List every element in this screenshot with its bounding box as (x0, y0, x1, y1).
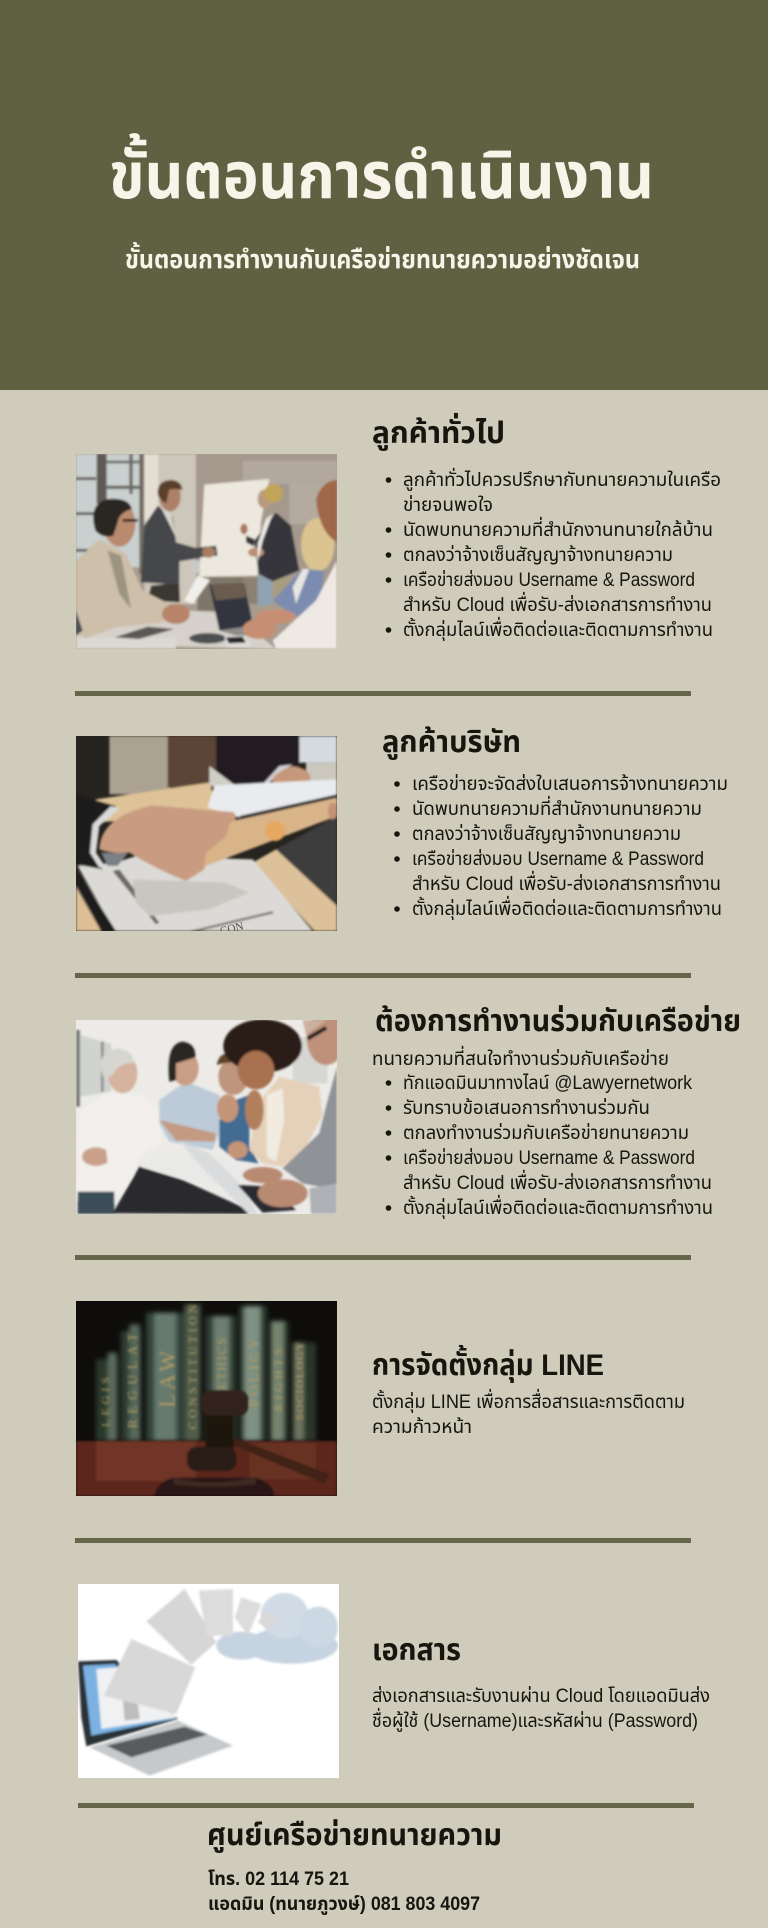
list: corporate clients: สำหรับ Cloud เพื่อรับ-ส่งเอกสารการทำงาน (412, 870, 721, 895)
photo: law books and gavel: POLICY (247, 1339, 262, 1407)
list: corporate clients: เครือข่ายส่งมอบ Username & Password (412, 847, 704, 870)
list: join the network: ตั้งกลุ่มไลน์เพื่อติดต่อและติดตามการทำงาน (403, 1194, 713, 1219)
text: documents description: ส่งเอกสารและรับงานผ่าน Cloud โดยแอดมินส่ง (372, 1684, 710, 1707)
heading: documents: เอกสาร (372, 1634, 461, 1667)
heading: LINE group: การจัดตั้งกลุ่ม LINE (372, 1344, 604, 1383)
photo: law books and gavel: CONSTITUTION (186, 1304, 200, 1429)
footer heading: ศูนย์เครือข่ายทนายความ (207, 1819, 502, 1853)
list: general clients: ลูกค้าทั่วไปควรปรึกษากับทนายความในเครือ (403, 467, 721, 492)
list: general clients: เครือข่ายส่งมอบ Username & Password (403, 568, 695, 591)
list: join the network (372, 1045, 713, 1219)
photo: law books and gavel: LAW (154, 1351, 179, 1408)
photo: law books and gavel (76, 1301, 337, 1496)
footer contact: แอดมิน (ทนายภูวงษ์) 081 803 4097 (208, 1894, 480, 1915)
heading: general clients: ลูกค้าทั่วไป (372, 412, 505, 451)
title: ขั้นตอนการดำเนินงาน (109, 132, 654, 212)
photo: law books and gavel: ETHICS (215, 1338, 229, 1389)
heading: join the network: ต้องการทำงานร่วมกับเครือข่าย (375, 1005, 741, 1038)
photo: business meeting (76, 454, 337, 649)
text: LINE group description (372, 1388, 685, 1438)
photo: law books and gavel: SOCIOLOGY (294, 1342, 306, 1420)
photo: laptop and cloud documents (78, 1584, 339, 1778)
photo: law books and gavel: RIGHTS (271, 1348, 285, 1412)
text: documents description (372, 1684, 710, 1733)
footer contact: โทร. 02 114 75 21 (208, 1869, 349, 1890)
footer contact (208, 1869, 480, 1915)
list: corporate clients: ตกลงว่าจ้างเซ็นสัญญาจ้างทนายความ (412, 822, 681, 845)
list: join the network: ตกลงทำงานร่วมกับเครือข่ายทนายความ (403, 1121, 689, 1144)
text: documents description: ชื่อผู้ใช้ (Username)และรหัสผ่าน (Password) (372, 1707, 698, 1733)
list: join the network: ทักแอดมินมาทางไลน์ @Lawyernetwork (403, 1073, 692, 1094)
header band (0, 0, 768, 390)
list: corporate clients: นัดพบทนายความที่สำนักงานทนายความ (412, 795, 702, 820)
list: corporate clients: เครือข่ายจะจัดส่งใบเสนอการจ้างทนายความ (412, 772, 728, 795)
text: LINE group description: ความก้าวหน้า (372, 1415, 472, 1438)
photo: law books and gavel: REGULAT (125, 1333, 140, 1428)
text: LINE group description: ตั้งกลุ่ม LINE เพื่อการสื่อสารและการติดตาม (372, 1388, 685, 1413)
photo: handing over envelope (76, 736, 337, 938)
list: general clients: ข่ายจนพอใจ (403, 493, 493, 516)
photo: team around laptop (76, 1020, 337, 1214)
list: corporate clients: ตั้งกลุ่มไลน์เพื่อติดต่อและติดตามการทำงาน (412, 895, 722, 920)
subtitle: ขั้นตอนการทำงานกับเครือข่ายทนายความอย่างชัดเจน (125, 242, 640, 274)
list: corporate clients (394, 772, 728, 920)
list: join the network: ทนายความที่สนใจทำงานร่วมกับเครือข่าย (372, 1045, 669, 1070)
list: join the network: เครือข่ายส่งมอบ Username & Password (403, 1146, 695, 1169)
list: general clients (386, 467, 721, 641)
photo: handing over envelope: CON (219, 920, 245, 938)
list: join the network: สำหรับ Cloud เพื่อรับ-ส่งเอกสารการทำงาน (403, 1169, 712, 1194)
list: general clients: สำหรับ Cloud เพื่อรับ-ส่งเอกสารการทำงาน (403, 591, 712, 616)
list: general clients: นัดพบทนายความที่สำนักงานทนายใกล้บ้าน (403, 516, 713, 541)
list: general clients: ตกลงว่าจ้างเซ็นสัญญาจ้างทนายความ (403, 543, 673, 566)
heading: corporate clients: ลูกค้าบริษัท (382, 726, 521, 760)
list: general clients: ตั้งกลุ่มไลน์เพื่อติดต่อและติดตามการทำงาน (403, 616, 713, 641)
list: join the network: รับทราบข้อเสนอการทำงานร่วมกัน (403, 1096, 650, 1119)
photo: law books and gavel: LEGIS (98, 1377, 112, 1427)
